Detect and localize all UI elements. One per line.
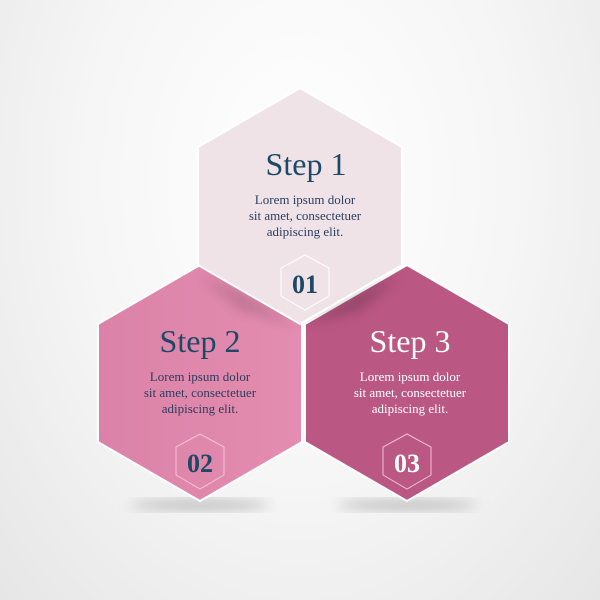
badge: 02: 02 xyxy=(187,449,213,478)
heading: step 3: Step 3 xyxy=(370,323,450,359)
text: step 3 body: sit amet, consectetuer xyxy=(354,385,467,400)
badge: 02 xyxy=(176,434,224,489)
hexagon: step 3 xyxy=(305,265,509,501)
text: step 3 body: Lorem ipsum dolor xyxy=(360,369,461,384)
badge: 03: 03 xyxy=(394,449,420,478)
text: step 2 body: sit amet, consectetuer xyxy=(144,385,257,400)
text: step 1 body: adipiscing elit. xyxy=(267,224,343,239)
text: step 1 body: Lorem ipsum dolor xyxy=(255,192,356,207)
badge: 01: 01 xyxy=(292,270,318,299)
text: step 2 body: adipiscing elit. xyxy=(162,401,238,416)
text: step 2 body: Lorem ipsum dolor xyxy=(150,369,251,384)
text: step 1 body: sit amet, consectetuer xyxy=(249,208,362,223)
badge: 03 xyxy=(383,434,431,489)
badge: 01 xyxy=(281,255,329,310)
hexagon: step 2 xyxy=(98,265,302,501)
heading: step 1: Step 1 xyxy=(266,146,346,182)
text: step 3 body: adipiscing elit. xyxy=(372,401,448,416)
heading: step 2: Step 2 xyxy=(160,323,240,359)
hexagon: step 1 xyxy=(198,88,402,324)
